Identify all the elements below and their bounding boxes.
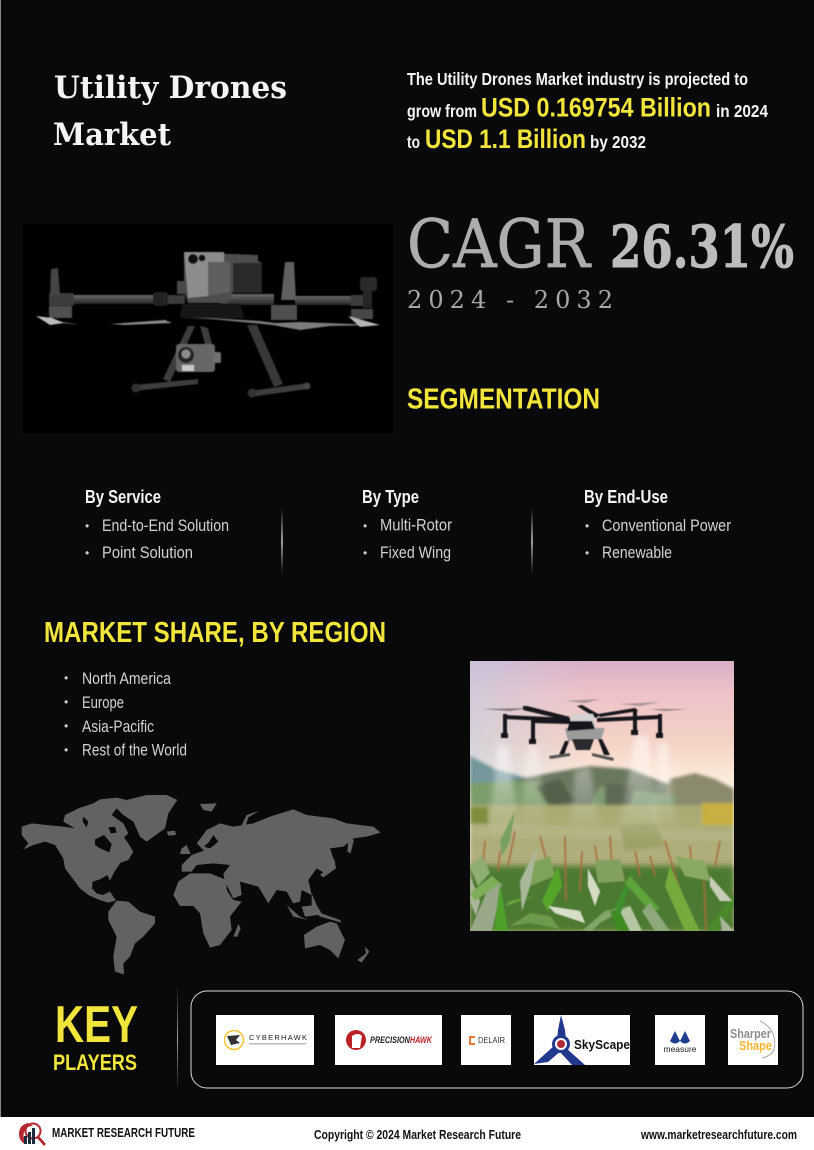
logo: sharper shape: Shape [739, 1038, 772, 1053]
region list: North America [82, 670, 172, 688]
segment: by type: • [363, 519, 367, 533]
segment: by service: By Service [85, 487, 161, 507]
key players heading: KEY [55, 996, 138, 1054]
segment: by service [85, 487, 229, 562]
logo: measure [655, 1015, 705, 1065]
title: Utility Drones [54, 70, 287, 106]
CAGR period: 2024 - 2032 [407, 286, 613, 314]
logo: precisionhawk [335, 1015, 442, 1065]
market forecast text [407, 69, 768, 154]
region list: • [64, 719, 68, 733]
farm drone photo [470, 661, 734, 931]
region list: Rest of the World [82, 742, 187, 760]
segment: by type: Multi-Rotor [380, 516, 452, 534]
segment: by service: • [85, 546, 89, 560]
region list: • [64, 695, 68, 709]
hills and field [470, 756, 734, 931]
logo: skyscape: SkyScape [574, 1037, 630, 1052]
corn crop [470, 811, 734, 931]
market forecast text: grow from [407, 101, 477, 121]
title [53, 70, 287, 153]
region list [64, 670, 187, 760]
logo: measure: measure [664, 1044, 697, 1054]
logo: sharper shape: Sharper [730, 1026, 771, 1041]
segment: by end-use: • [585, 519, 589, 533]
market forecast text: USD 0.169754 Billion [481, 92, 711, 122]
drone arms [49, 292, 365, 306]
logo: precisionhawk: PRECISIONHAWK [370, 1035, 433, 1045]
logo: delair [461, 1015, 511, 1065]
segmentation heading: SEGMENTATION [407, 384, 600, 416]
segment: by end-use [584, 487, 731, 562]
logo: delair: DELAIR [478, 1035, 505, 1045]
market share heading: MARKET SHARE, BY REGION [44, 617, 386, 649]
segment: by end-use: • [585, 546, 589, 560]
spraying drone [482, 699, 687, 761]
logo: cyberhawk: CYBERHAWK [249, 1033, 307, 1042]
drone body [177, 252, 262, 320]
key players heading [53, 996, 138, 1075]
footer [0, 1117, 814, 1150]
key players heading: PLAYERS [53, 1050, 137, 1075]
segment: by type: Fixed Wing [380, 544, 451, 562]
footer: MARKET RESEARCH FUTURE [52, 1126, 195, 1140]
segment: by type [362, 487, 452, 562]
drone rotors [36, 262, 380, 330]
market forecast text: in 2024 [716, 101, 768, 121]
logo: cyberhawk [216, 1015, 314, 1065]
logo: skyscape [534, 1015, 630, 1065]
market forecast text: to [407, 132, 420, 152]
segment: by end-use: Conventional Power [602, 517, 731, 535]
title: Market [53, 117, 172, 153]
region list: • [64, 743, 68, 757]
footer logo [19, 1123, 46, 1146]
segment: by end-use: Renewable [602, 544, 672, 562]
segment: by service: • [85, 519, 89, 533]
segment: by end-use: By End-Use [584, 487, 668, 507]
CAGR figure [407, 206, 794, 283]
segment: by service: Point Solution [102, 544, 193, 562]
drone image [23, 224, 393, 433]
region list: Asia-Pacific [82, 718, 154, 736]
market forecast text: by 2032 [590, 132, 646, 152]
footer: Copyright © 2024 Market Research Future [314, 1128, 521, 1142]
drone camera and landing gear [132, 325, 310, 398]
segment: by type: • [363, 546, 367, 560]
market forecast text: USD 1.1 Billion [425, 124, 586, 154]
segment: by type: By Type [362, 487, 419, 507]
region list: Europe [82, 694, 124, 712]
region list: • [64, 671, 68, 685]
key players panel [191, 991, 803, 1088]
spray plumes [488, 736, 676, 841]
segment: by service: End-to-End Solution [102, 517, 229, 535]
logo: sharper shape [728, 1015, 778, 1065]
world map [22, 795, 381, 974]
market forecast text: The Utility Drones Market industry is projected to [407, 69, 748, 89]
CAGR figure: CAGR [407, 206, 592, 283]
